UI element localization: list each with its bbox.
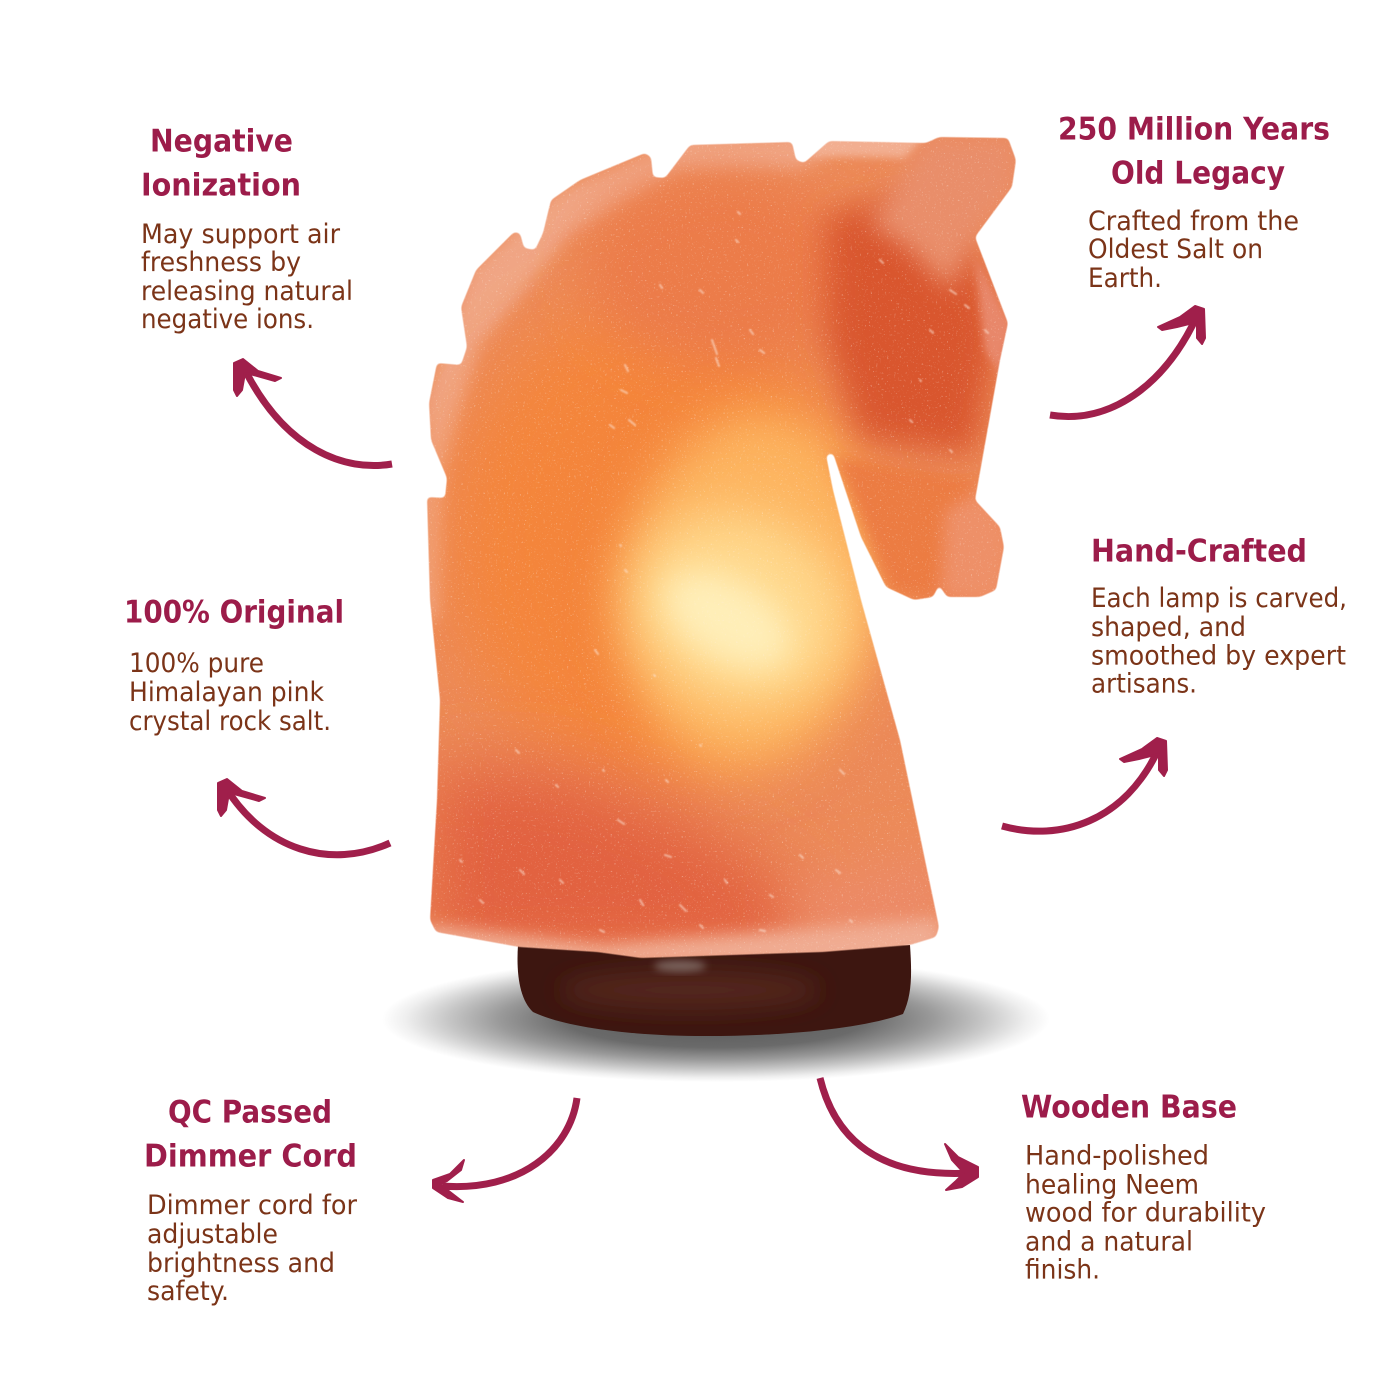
callout: wooden base: Hand-polished: [1025, 1140, 1209, 1172]
arrow: wooden base: [820, 1078, 978, 1190]
callout: hand-crafted: Hand-Crafted: [1091, 534, 1307, 570]
mane and edge tone: [420, 135, 860, 620]
callout: 250 million years: [1058, 112, 1330, 294]
salt speckles: [460, 212, 988, 932]
head red area: [825, 190, 998, 455]
arrow: 100% original: [218, 779, 390, 855]
callout: QC passed dimmer cord: Dimmer Cord: [144, 1138, 357, 1174]
nose tone: [940, 490, 1010, 600]
callout: QC passed dimmer cord: Dimmer cord for: [147, 1190, 358, 1221]
callout: negative ionization: [141, 124, 353, 335]
salt grain: [420, 130, 1020, 960]
callout: wooden base: Wooden Base: [1021, 1090, 1237, 1126]
callout: QC passed dimmer cord: [144, 1094, 358, 1307]
callout: 250 million years: Earth.: [1088, 263, 1162, 294]
callout: 250 million years: Crafted from the: [1088, 206, 1299, 237]
mane top pale strip: [814, 141, 922, 162]
upper neck tone: [585, 175, 855, 365]
hot centre: [651, 558, 803, 683]
callout: wooden base: [1021, 1090, 1266, 1286]
face ridge pale: [974, 262, 1008, 372]
callout: hand-crafted: smoothed by expert: [1091, 640, 1346, 672]
callout: hand-crafted: [1091, 534, 1347, 700]
callout: negative ionization: Ionization: [141, 168, 301, 204]
callout: negative ionization: negative ions.: [141, 304, 314, 335]
lower right tone: [782, 862, 935, 929]
floor shadow: [382, 956, 1050, 1082]
arrow: hand-crafted: [1002, 738, 1167, 831]
callout: negative ionization: freshness by: [141, 247, 301, 278]
callout: negative ionization: releasing natural: [141, 276, 353, 307]
callout: hand-crafted: shaped, and: [1091, 612, 1246, 643]
callout: QC passed dimmer cord: safety.: [147, 1276, 229, 1307]
orange body glow: [450, 300, 860, 780]
core glow: [606, 493, 868, 728]
arrow: 250 million years: [1050, 306, 1205, 417]
callout: 100% original: 100% Original: [124, 594, 344, 630]
callout: hand-crafted: Each lamp is carved,: [1091, 583, 1347, 614]
callout: 100% original: [124, 594, 344, 737]
bottom pale edge: [425, 918, 940, 965]
callout: 100% original: 100% pure: [129, 648, 264, 679]
salt lamp horse head: [420, 130, 1020, 965]
wooden base: [518, 945, 911, 1036]
head forehead pale: [870, 135, 1020, 290]
callout: 250 million years: 250 Million Years: [1058, 112, 1330, 148]
callout: wooden base: healing Neem: [1025, 1170, 1199, 1200]
warm glow: [598, 394, 906, 786]
lower body red band: [425, 770, 850, 965]
callout: 100% original: Himalayan pink: [129, 677, 324, 708]
callout: 250 million years: Old Legacy: [1111, 156, 1285, 192]
callout: 250 million years: Oldest Salt on: [1088, 234, 1263, 265]
callout: QC passed dimmer cord: QC Passed: [168, 1094, 332, 1130]
callout: wooden base: wood for durability: [1025, 1198, 1266, 1228]
callout: wooden base: finish.: [1025, 1254, 1100, 1286]
arrow: QC passed dimmer cord: [433, 1098, 577, 1202]
callout: QC passed dimmer cord: brightness and: [147, 1248, 335, 1279]
callout: negative ionization: Negative: [150, 124, 293, 160]
callout: negative ionization: May support air: [141, 219, 341, 250]
callout: wooden base: and a natural: [1025, 1226, 1193, 1258]
callout: 100% original: crystal rock salt.: [129, 706, 331, 737]
callout: hand-crafted: artisans.: [1091, 668, 1197, 700]
callout: QC passed dimmer cord: adjustable: [147, 1219, 278, 1250]
jaw tone: [833, 455, 975, 600]
arrow: negative ionization: [234, 359, 392, 466]
